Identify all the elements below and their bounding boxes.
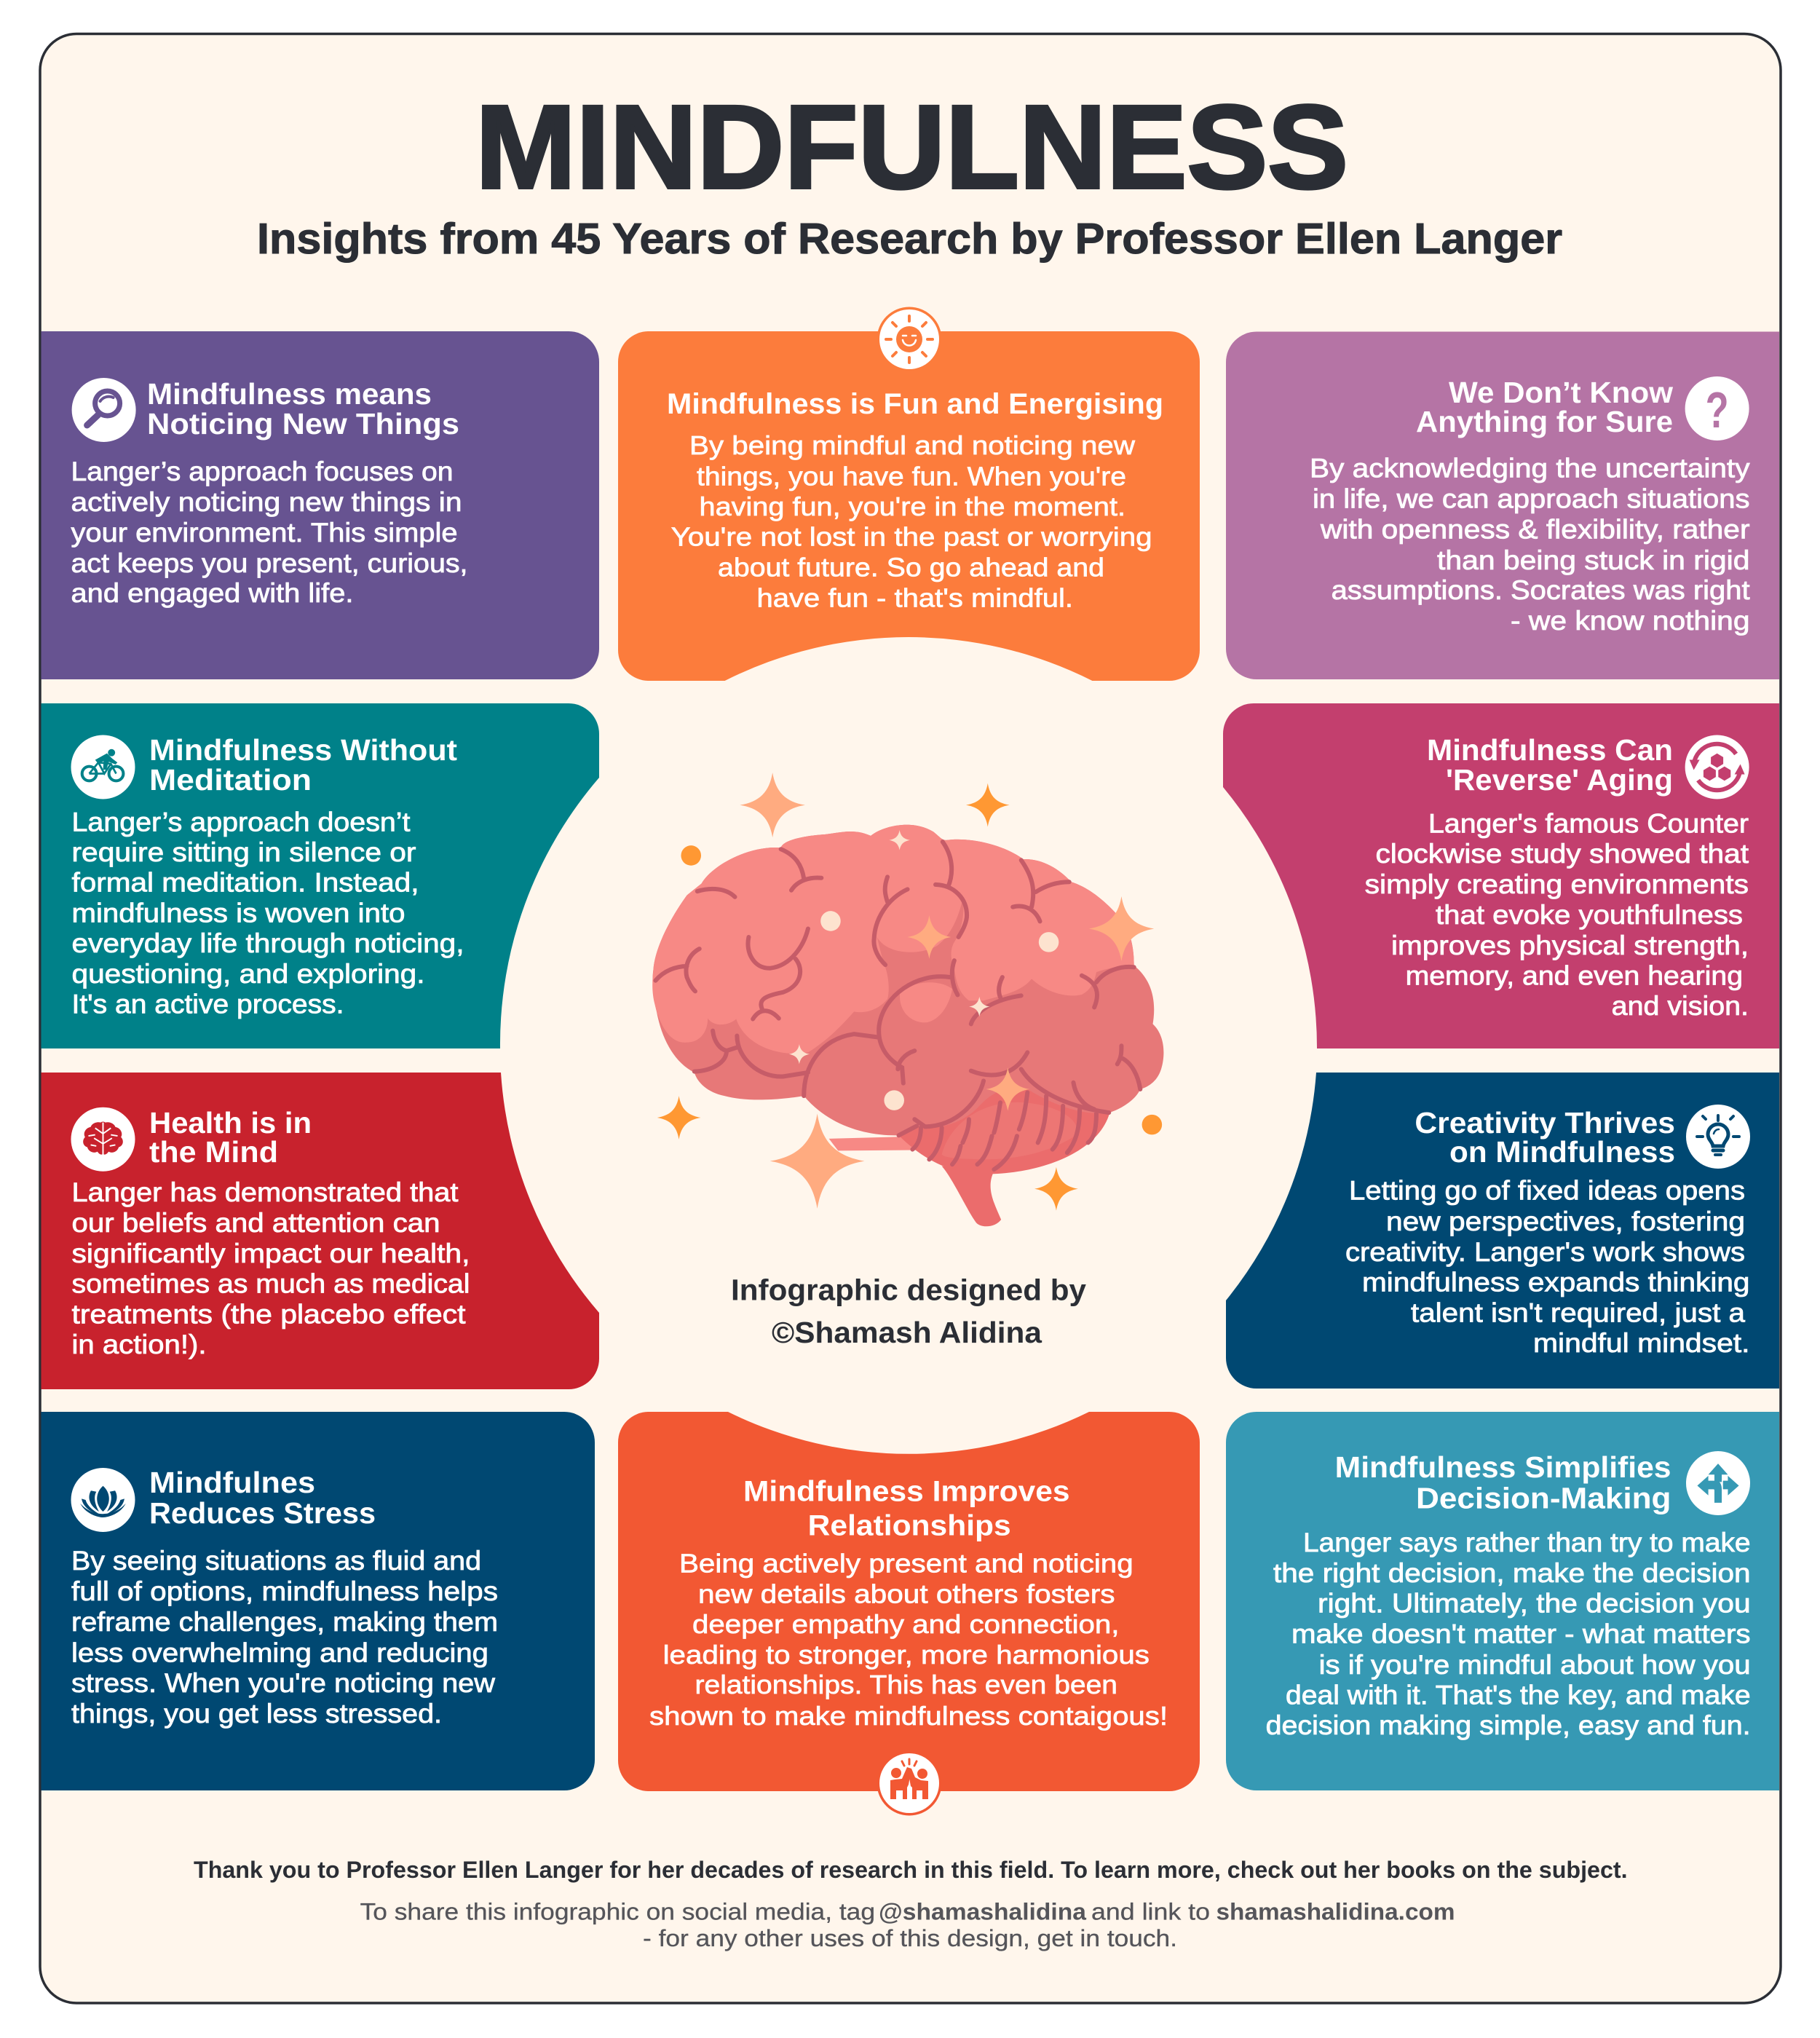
body text: assumptions. Socrates was right [1332,575,1750,605]
body text: Langer’s approach focuses on [71,457,453,486]
icon: high five [877,1750,942,1816]
heading: Mindfulness Can [1427,733,1673,767]
body text [71,1177,470,1359]
credit: Infographic designed by [731,1273,1086,1307]
panel: creativity [1226,1073,1779,1389]
body text: sometimes as much as medical [71,1269,470,1299]
body text: with openness & flexibility, rather [1320,515,1750,545]
body text [1266,1528,1751,1740]
body text: and engaged with life. [71,578,354,608]
heading: Mindfulnes [149,1466,315,1499]
heading: Relationships [808,1510,1011,1542]
panel: fun and energising [618,307,1200,681]
body text: Langer has demonstrated that [71,1177,459,1207]
panel: improves relationships [618,1412,1200,1816]
temporal highlight [900,982,952,1022]
heading: on Mindfulness [1449,1135,1675,1169]
heading [1416,376,1673,438]
heading [1427,733,1673,797]
heading: Health is in [149,1106,312,1140]
icon: smiling sun [877,307,942,371]
icon: question mark [1685,376,1749,441]
heading [149,733,457,797]
body text: It's an active process. [71,989,344,1019]
body text: formal meditation. Instead, [71,868,419,897]
body text [1310,453,1750,636]
body text: decision making simple, easy and fun. [1266,1710,1751,1740]
body text: creativity. Langer's work shows [1345,1237,1745,1267]
icon: cyclist [71,735,135,799]
icon: brain [71,1107,135,1172]
body text: mindful mindset. [1533,1328,1750,1358]
footer share note [360,1899,1455,1951]
heading: Creativity Thrives [1415,1106,1675,1140]
icon: direction arrows [1686,1451,1750,1515]
body text: You're not lost in the past or worrying [671,522,1152,552]
body text: By seeing situations as fluid and [71,1546,481,1576]
body text: improves physical strength, [1391,931,1749,960]
body text: Langer's famous Counter [1428,808,1749,838]
body text: things, you have fun. When you're [697,461,1126,491]
body text [1345,1176,1750,1358]
body text: talent isn't required, just a [1411,1298,1745,1327]
body text: new perspectives, fostering [1386,1206,1745,1236]
panel: decision-making [1226,1412,1779,1790]
body text: mindfulness expands thinking [1362,1268,1750,1298]
body text [71,1546,498,1729]
body text: than being stuck in rigid [1437,545,1750,575]
heading: Reduces Stress [149,1496,376,1530]
icon: light bulb [1686,1105,1750,1169]
body text: memory, and even hearing [1406,961,1743,991]
heading: We Don’t Know [1449,376,1673,409]
body text [71,807,464,1019]
panel: without meditation [41,703,599,1048]
icon: magnifier [72,378,136,442]
body text: significantly impact our health, [71,1239,470,1268]
panel: reverse aging [1223,703,1779,1048]
heading [149,1466,376,1530]
body text: in action!). [71,1330,207,1359]
body text: have fun - that's mindful. [757,583,1073,613]
body text: in life, we can approach situations [1313,484,1750,514]
icon: question mark: ? [1706,382,1729,438]
credit [731,1273,1086,1349]
body text: - we know nothing [1511,606,1750,636]
body text: having fun, you're in the moment. [699,491,1125,521]
body text: Langer’s approach doesn’t [71,807,411,837]
body text: new details about others fosters [698,1579,1115,1609]
footer share note: and link to [1091,1899,1210,1925]
heading: Mindfulness means [147,377,432,411]
body text: make doesn't matter - what matters [1291,1619,1751,1648]
body text: and vision. [1612,991,1749,1021]
footer share note: @shamashalidina [879,1899,1086,1925]
body text [1365,808,1749,1021]
heading [743,1475,1070,1542]
brain stem and nerve [829,1137,1001,1226]
heading: Mindfulness Improves [743,1475,1070,1507]
body text: treatments (the placebo effect [71,1299,466,1329]
body text: deal with it. That's the key, and make [1286,1680,1751,1710]
body text: actively noticing new things in [71,487,462,517]
panel: we don't know [1226,332,1779,679]
body text [671,430,1152,613]
cerebrum highlight [652,825,1134,1054]
footer share note: To share this infographic on social media, tag [360,1899,875,1925]
body text: shown to make mindfulness contaigous! [649,1701,1168,1731]
body text: less overwhelming and reducing [71,1638,488,1667]
heading: the Mind [149,1135,278,1169]
body text: your environment. This simple [71,518,457,548]
body text: Letting go of fixed ideas opens [1349,1176,1745,1206]
body text: simply creating environments [1365,869,1749,899]
body text: the right decision, make the decision [1273,1558,1751,1588]
cream sparkles and dots [789,830,1059,1110]
orange sparkles and dots [657,783,1162,1211]
body text: leading to stronger, more harmonious [663,1640,1150,1670]
body text: right. Ultimately, the decision you [1318,1589,1751,1619]
body text: By acknowledging the uncertainty [1310,453,1750,483]
body text: deeper empathy and connection, [692,1609,1120,1639]
icon: lotus [71,1468,135,1532]
footer share note: shamashalidina.com [1216,1899,1455,1925]
body text: things, you get less stressed. [71,1699,442,1729]
cerebrum base [652,825,1163,1135]
body text: stress. When you're noticing new [71,1668,495,1698]
body text: act keeps you present, curious, [71,548,467,578]
body text: Langer says rather than try to make [1303,1528,1751,1557]
body text: relationships. This has even been [695,1670,1117,1699]
heading: Anything for Sure [1416,405,1673,438]
heading: Decision-Making [1416,1481,1671,1514]
body text: full of options, mindfulness helps [71,1576,498,1606]
body text: questioning, and exploring. [71,959,425,989]
body text [649,1548,1168,1731]
heading: Meditation [149,763,312,797]
body text: everyday life through noticing, [71,928,464,958]
body text: that evoke youthfulness [1436,900,1743,930]
folds [655,842,1140,1169]
body text: is if you're mindful about how you [1319,1650,1751,1680]
heading: Mindfulness Simplifies [1335,1450,1671,1484]
heading: Noticing New Things [147,407,459,441]
cerebellum [899,1062,1109,1174]
body text: By being mindful and noticing new [689,430,1136,460]
panel: health in the mind [41,1073,599,1389]
peach sparkles [740,773,1154,1209]
heading: Mindfulness Without [149,733,457,767]
footer share note: - for any other uses of this design, get in touch. [643,1925,1177,1951]
body text: about future. So go ahead and [718,552,1104,582]
cerebellum highlight [942,1102,1077,1159]
heading [1335,1450,1671,1514]
body text [71,457,467,608]
icon: aging cycle [1685,735,1749,799]
body text: reframe challenges, making them [71,1607,498,1637]
heading: 'Reverse' Aging [1446,763,1673,797]
body text: mindfulness is woven into [71,898,405,928]
heading [1415,1106,1675,1169]
panel: noticing new things [41,331,599,679]
heading [149,1106,312,1169]
title: MINDFULNESS [475,80,1348,213]
credit: ©Shamash Alidina [772,1316,1042,1349]
panel: reduces stress [41,1412,595,1790]
brain illustration with sparkles [652,773,1163,1226]
body text: clockwise study showed that [1376,839,1749,869]
body text: Being actively present and noticing [679,1548,1133,1579]
footer thanks: Thank you to Professor Ellen Langer for her decades of research in this field. To learn more, check out her books on the subject. [194,1857,1628,1883]
subtitle: Insights from 45 Years of Research by Professor Ellen Langer [257,215,1562,263]
body text: require sitting in silence or [71,837,416,867]
body text: our beliefs and attention can [71,1208,440,1238]
heading [147,377,459,441]
heading: Mindfulness is Fun and Energising [667,388,1163,420]
